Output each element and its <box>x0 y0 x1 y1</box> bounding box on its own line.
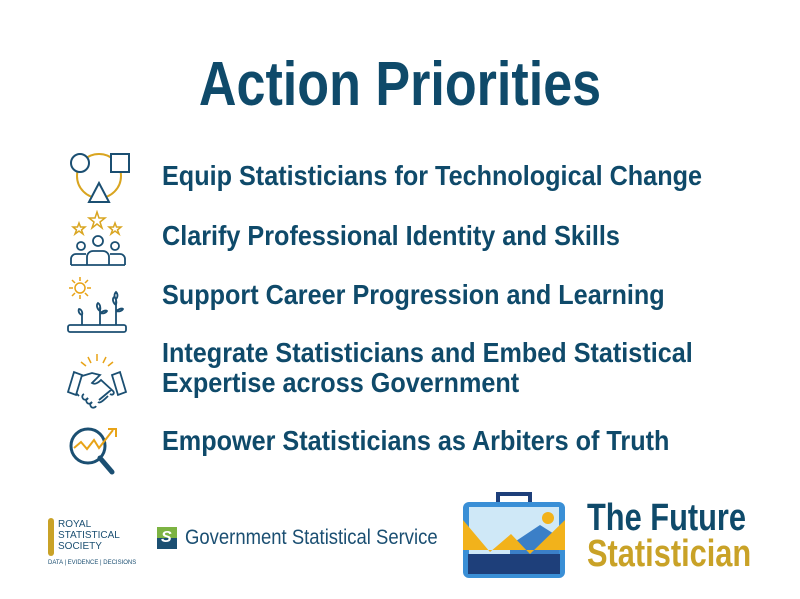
text 4: Expertise across Government <box>162 367 519 398</box>
icon: shapes <box>70 153 130 203</box>
logo: briefcase <box>463 492 565 578</box>
text 2: Clarify Professional Identity and Skills <box>162 220 620 251</box>
icon: magnifier chart <box>70 428 117 474</box>
logo: RSS: ROYAL <box>58 519 91 530</box>
text 3: Support Career Progression and Learning <box>162 279 665 310</box>
logo: RSS: DATA | EVIDENCE | DECISIONS <box>48 560 136 566</box>
logo: GSS: S <box>161 529 172 546</box>
logo text: The Future Statistician: The Future <box>587 497 746 539</box>
logo text: The Future Statistician <box>587 497 751 575</box>
logo: RSS: SOCIETY <box>58 541 102 552</box>
text 4: Integrate Statisticians and Embed Statistical <box>162 337 693 368</box>
logo text: The Future Statistician: Statistician <box>587 533 751 575</box>
logo: GSS: Government Statistical Service <box>185 526 438 549</box>
text 1: Equip Statisticians for Technological Change <box>162 160 702 191</box>
text 4 <box>162 337 693 398</box>
icon: growing plants <box>67 277 127 333</box>
title: Action Priorities <box>199 50 601 119</box>
icon: handshake <box>66 354 128 409</box>
logo: RSS: STATISTICAL <box>58 530 120 541</box>
text 5: Empower Statisticians as Arbiters of Truth <box>162 425 669 456</box>
icon: team stars <box>70 210 126 266</box>
logo: RSS <box>48 518 136 566</box>
